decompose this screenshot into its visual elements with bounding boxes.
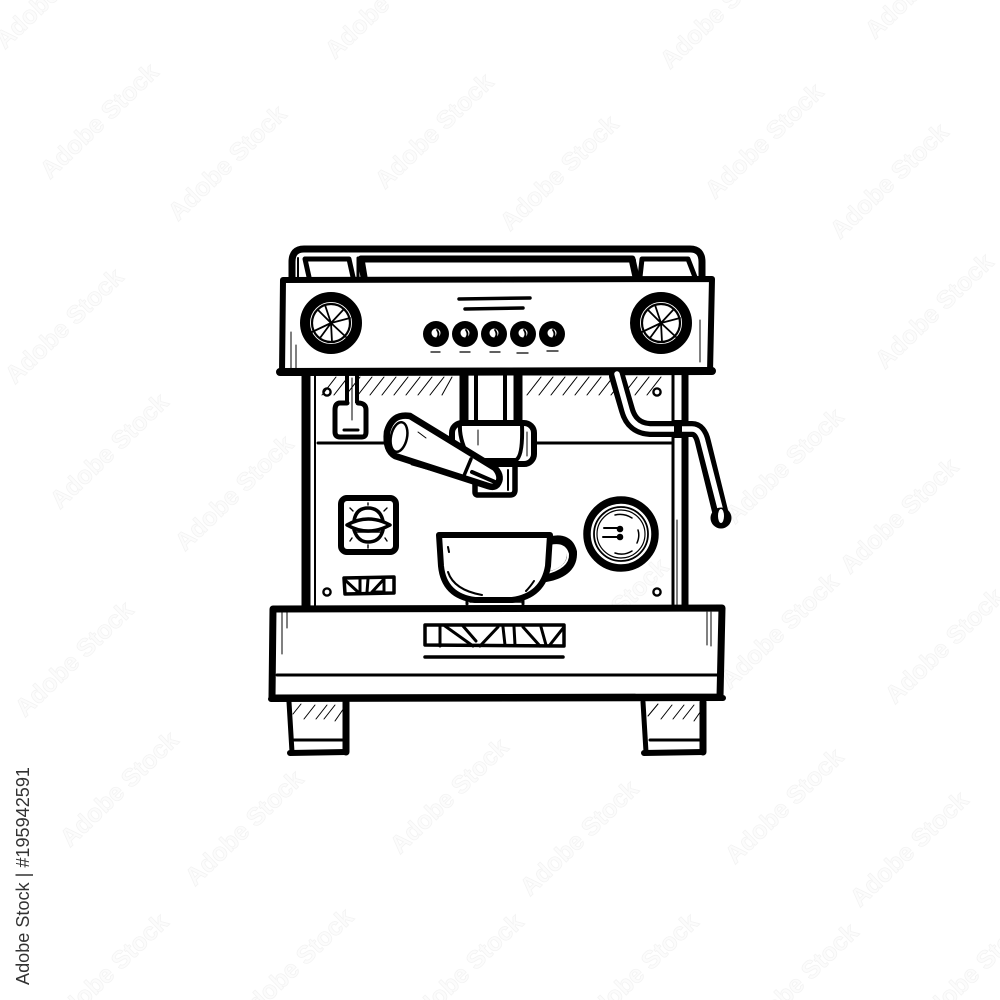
watermark pattern: Adobe Stock (870, 248, 999, 374)
back panel hatching (322, 377, 661, 395)
watermark pattern: Adobe Stock (10, 596, 139, 722)
left tool holder (335, 376, 366, 437)
watermark pattern: Adobe Stock (715, 568, 844, 694)
grinder selector dial (341, 498, 396, 552)
watermark pattern: Adobe Stock (495, 110, 624, 236)
watermark pattern: Adobe Stock (385, 733, 514, 859)
watermark pattern: Adobe Stock (163, 100, 292, 226)
panel divider line (318, 442, 673, 444)
top rail and cup tray (292, 249, 702, 277)
screws (323, 388, 661, 596)
watermark pattern: Adobe Stock (515, 775, 644, 901)
watermark pattern: Adobe Stock (720, 743, 849, 869)
drip tray base (271, 608, 723, 699)
portafilter handle (387, 416, 500, 487)
rear columns (306, 374, 685, 606)
tray vent plate (425, 625, 564, 646)
left foot (289, 702, 346, 753)
watermark pattern: Adobe Stock (370, 68, 499, 194)
watermark pattern: Adobe Stock (170, 430, 299, 556)
group body (452, 423, 534, 495)
right pressure gauge (635, 297, 687, 349)
watermark pattern: Adobe Stock (720, 403, 849, 529)
steam wand (617, 374, 732, 528)
stock credit text: Adobe Stock | #195942591 (13, 767, 33, 985)
espresso machine (271, 249, 732, 753)
dial thermometer (587, 500, 655, 568)
right foot (643, 702, 703, 753)
watermark pattern: Adobe Stock (55, 726, 184, 852)
control buttons (423, 321, 565, 353)
panel label lines (459, 298, 530, 309)
small nameplate (344, 577, 394, 594)
watermark pattern: Adobe Stock (545, 553, 674, 679)
watermark pattern: Adobe Stock (45, 388, 174, 514)
watermark pattern: Adobe Stock (700, 78, 829, 204)
watermark pattern: Adobe Stock (835, 453, 964, 579)
group head posts (464, 375, 518, 423)
coffee cup (439, 535, 572, 604)
watermark pattern: Adobe Stock (35, 58, 164, 184)
watermark pattern: Adobe Stock (180, 765, 309, 891)
tray label line (425, 655, 563, 659)
watermark pattern: Adobe Stock (825, 118, 954, 244)
watermark pattern: Adobe Stock (845, 786, 974, 912)
head panel (280, 279, 712, 373)
watermark pattern: Adobe Stock (0, 263, 129, 389)
left pressure gauge (305, 297, 357, 349)
